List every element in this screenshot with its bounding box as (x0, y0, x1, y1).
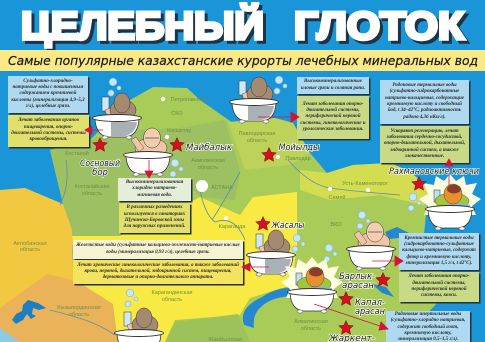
region: Kyzylorda dark orange (0, 274, 118, 342)
region: Aktobe orange (0, 188, 75, 342)
resort names: Мойылды (278, 143, 320, 153)
figure: Zhasaly bathtub (246, 230, 305, 276)
panel: Zhasaly treatment: Лечат хронические гинекологические заболевания, а также заболеваний крови, нервной, дыхательной, эндокринной систем, пищеварения, дерматозовые и опорно-двигательного аппарата. (77, 263, 239, 280)
title: ЦЕЛЕБНЫЙ (24, 6, 267, 50)
title: ГЛОТОК (294, 5, 464, 48)
region labels: область (162, 297, 182, 303)
panel: Zhasaly treatment (73, 260, 243, 284)
panel: Sosnovy Bor water: Сульфатно-хлоридно-натриевые воды с повышенным содержанием кремниевой кислоты (минерализация 4,9–5,3 г/л), целебные грязи. (11, 79, 85, 109)
rivers (50, 160, 400, 335)
Aral sea (12, 300, 46, 324)
panel: Rakhmanov treatment: Ускоряют регенерацию, лечат заболевания сердечно-сосудистой, опорно-двигательной, дыхательной, эндокринной систем, а также злокачественные. (384, 129, 465, 159)
region: Zhambyl green (165, 314, 250, 342)
eastern lakes (372, 227, 411, 297)
resort names: Майбалык (186, 143, 233, 153)
region labels: Усть-Каменогорск (342, 181, 388, 187)
panel: Barlyk treatment: Лечат заболевания опорно-двигательной системы, периферической нервной системы, кожи. (408, 274, 470, 298)
resort names: арасан (355, 307, 385, 317)
panel: Sosnovy Bor treatment (8, 115, 89, 147)
resort stars (93, 138, 426, 334)
region: Pavlodar yellow-green (228, 118, 310, 170)
arrows linking resorts to panels (85, 112, 453, 330)
region: East yellow-green (300, 163, 429, 205)
panel: Moiyldy water (297, 77, 369, 94)
resort names (80, 143, 479, 342)
region labels: область (247, 138, 267, 144)
panel: Moiyldy treatment: Лечат заболевания опорно-двигательной системы, периферической нервной системы, гинекологические и урологические заболевания. (300, 102, 366, 132)
panel: Barlyk water: Кремнистые термальные воды (гидрокарбонатно-сульфатные кальциево-натриевые, содержат фтор и кремниевую кислоту, минерализация 1,5 г/л, t 42°С). (402, 236, 476, 266)
resort names: Капал- (355, 298, 385, 308)
region labels: область (82, 191, 102, 197)
region labels: Карагандинская (152, 290, 193, 296)
figure: Maibalyk bathtub (124, 128, 183, 177)
panel: Maibalyk usage: В различных разведениях используется в санаториях Щучинско-Боровской зоны для наружных применений. (124, 205, 185, 229)
region labels: ВКО (330, 222, 342, 228)
resort names: арасан (342, 281, 374, 291)
panel: Sosnovy Bor treatment: Лечат заболевания органов пищеварения, опорно-двигательной системы, системы кровообращения. (11, 118, 86, 142)
panel: Moiyldy water: Высокоминерализованные иловые грязи и соляная рапа. (301, 79, 365, 90)
region: Karaganda yellow (72, 192, 297, 342)
resort names: Сосновый (80, 159, 120, 169)
region labels: АСТАНА (211, 185, 233, 191)
panel: Maibalyk water (118, 178, 191, 201)
title (21, 2, 470, 50)
panel: Zhasaly water: Железистые воды (сульфатные кальциево-железисто-натриевые кислые воды (минерализация 0,93 г/л), целебные грязи. (76, 243, 240, 254)
region labels: Костанайская (74, 183, 110, 190)
resort names: Барлык- (339, 272, 375, 282)
panel: Barlyk treatment (399, 272, 479, 302)
panel: Maibalyk water: Высокоминерализованная хлоридно натриево-магниевая вода. (126, 180, 183, 198)
region labels: Караганда (219, 224, 246, 230)
region labels: Павлодар (285, 156, 311, 162)
panel: Zhasaly water (73, 240, 243, 259)
figure: Moiyldy bathtub (230, 76, 287, 123)
region labels: Павлодарская (239, 131, 275, 137)
panel: Rakhmanov water: Радоновые термальные воды (сульфатно-гидрокарбонатные натриево-кальциевые, содержащие кремниевую кислоту и свободный йод, t 34–42°С, радиоактивность радона 4,36 нКи/л). (385, 83, 464, 120)
region labels: область (301, 326, 321, 332)
panel: Kapal water: Радоновые инертальные воды (сульфатно-хлоридно натриевая, содержит свободный азот, кремниевую кислоту, минерализация 0,5–1,5 г/л). (391, 312, 465, 342)
region labels: Костанай (65, 150, 89, 157)
panel: Moiyldy treatment (297, 96, 369, 139)
sea corner (0, 328, 20, 342)
region labels (13, 97, 388, 342)
region labels: область (69, 312, 89, 318)
title: ГЛОТОК (297, 8, 467, 50)
region labels: Петропавловск (171, 97, 210, 103)
region labels: Семей (329, 194, 345, 201)
region: Akmola and Kostanai darker green (50, 120, 240, 236)
region labels: Алматинская (294, 319, 328, 325)
figure: Sosnovy Bor bathtub (92, 78, 142, 139)
region: base green land (50, 87, 445, 342)
Lake Balkhash (243, 288, 296, 328)
region labels: Кызылординская (57, 305, 101, 311)
subtitle banner: Самые популярные казахстанские курорты лечебных минеральных вод (8, 53, 478, 68)
figure: Barlyk-Arasan bathtub (346, 211, 396, 270)
title: ЦЕЛЕБНЫЙ (21, 3, 264, 48)
resort names: Рахмановские ключи (389, 167, 479, 177)
city dots (161, 97, 370, 220)
region labels: область (20, 247, 40, 253)
figure: Rakhmanov bathtub (408, 174, 481, 230)
resort names: Жасалы (271, 221, 305, 231)
region labels: Кокшетау (167, 128, 191, 134)
figure: Kapal-Arasan bathtub (281, 244, 343, 313)
panel: Maibalyk usage (119, 203, 190, 233)
resort names: бор (92, 168, 108, 178)
region labels: СКО (171, 111, 183, 117)
region labels: Актюбинская (13, 241, 47, 247)
region labels: Акмолинская (191, 158, 225, 164)
figure: southern bathtub (114, 289, 164, 342)
region labels: область (198, 165, 218, 171)
